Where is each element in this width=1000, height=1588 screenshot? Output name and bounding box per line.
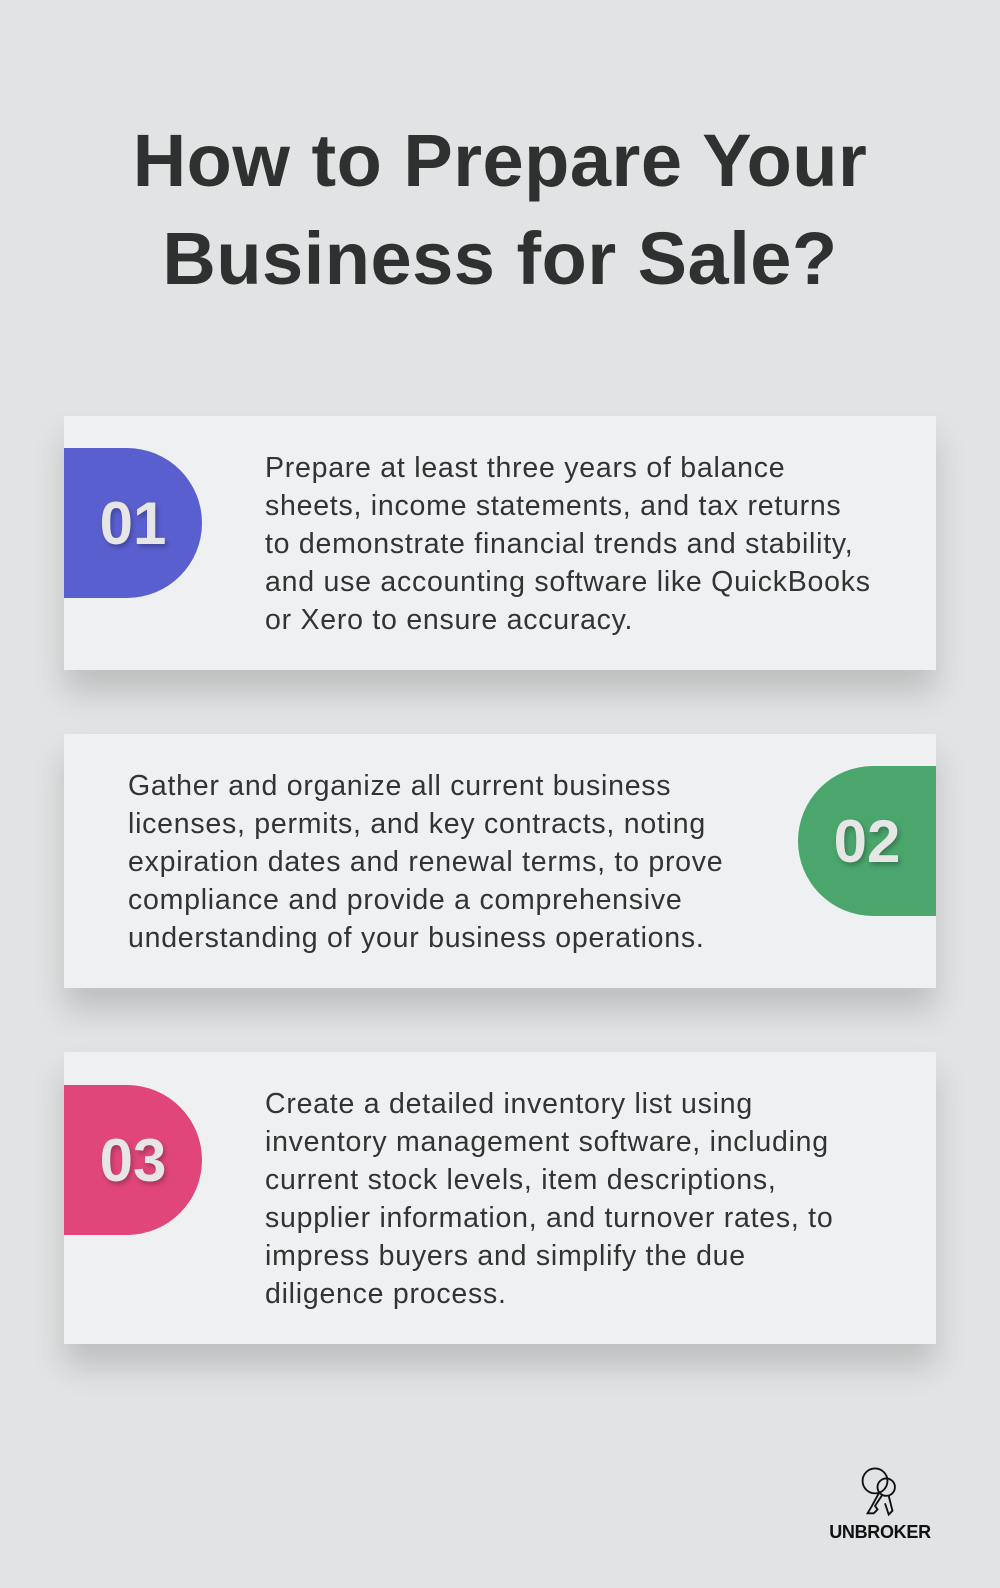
text 03: diligence process.	[265, 1278, 507, 1310]
badge 01: 01	[100, 490, 166, 556]
title	[133, 119, 867, 300]
logo	[829, 1468, 931, 1542]
text 03: impress buyers and simplify the due	[265, 1240, 746, 1272]
badge 02: 02	[834, 808, 900, 874]
text 01: and use accounting software like QuickBooks	[265, 566, 871, 598]
badge 03: 03	[100, 1126, 166, 1194]
text 03	[265, 1088, 833, 1310]
text 01	[265, 452, 871, 636]
text 03: supplier information, and turnover rates, to	[265, 1202, 833, 1234]
text 02: compliance and provide a comprehensive	[128, 884, 682, 916]
text 02: Gather and organize all current business	[128, 770, 671, 802]
card 01	[64, 416, 936, 670]
title: How to Prepare Your	[133, 119, 867, 202]
text 01: or Xero to ensure accuracy.	[265, 604, 633, 636]
badge 02	[798, 766, 936, 916]
card 02	[64, 734, 936, 988]
badge 01	[64, 448, 202, 598]
title: Business for Sale?	[162, 217, 838, 300]
text 02: understanding of your business operations.	[128, 922, 705, 954]
text 02: expiration dates and renewal terms, to prove	[128, 846, 723, 878]
text 02: licenses, permits, and key contracts, noting	[128, 808, 706, 840]
text 03: current stock levels, item descriptions,	[265, 1164, 777, 1196]
icon: keys	[862, 1468, 896, 1516]
text 03: inventory management software, including	[265, 1126, 829, 1158]
badge 03	[64, 1085, 202, 1235]
brand name: UNBROKER	[829, 1522, 931, 1542]
card 03	[64, 1052, 936, 1344]
text 01: Prepare at least three years of balance	[265, 452, 785, 484]
text 01: sheets, income statements, and tax returns	[265, 490, 841, 522]
text 01: to demonstrate financial trends and stability,	[265, 528, 853, 560]
text 03: Create a detailed inventory list using	[265, 1088, 753, 1120]
text 02	[128, 770, 723, 954]
